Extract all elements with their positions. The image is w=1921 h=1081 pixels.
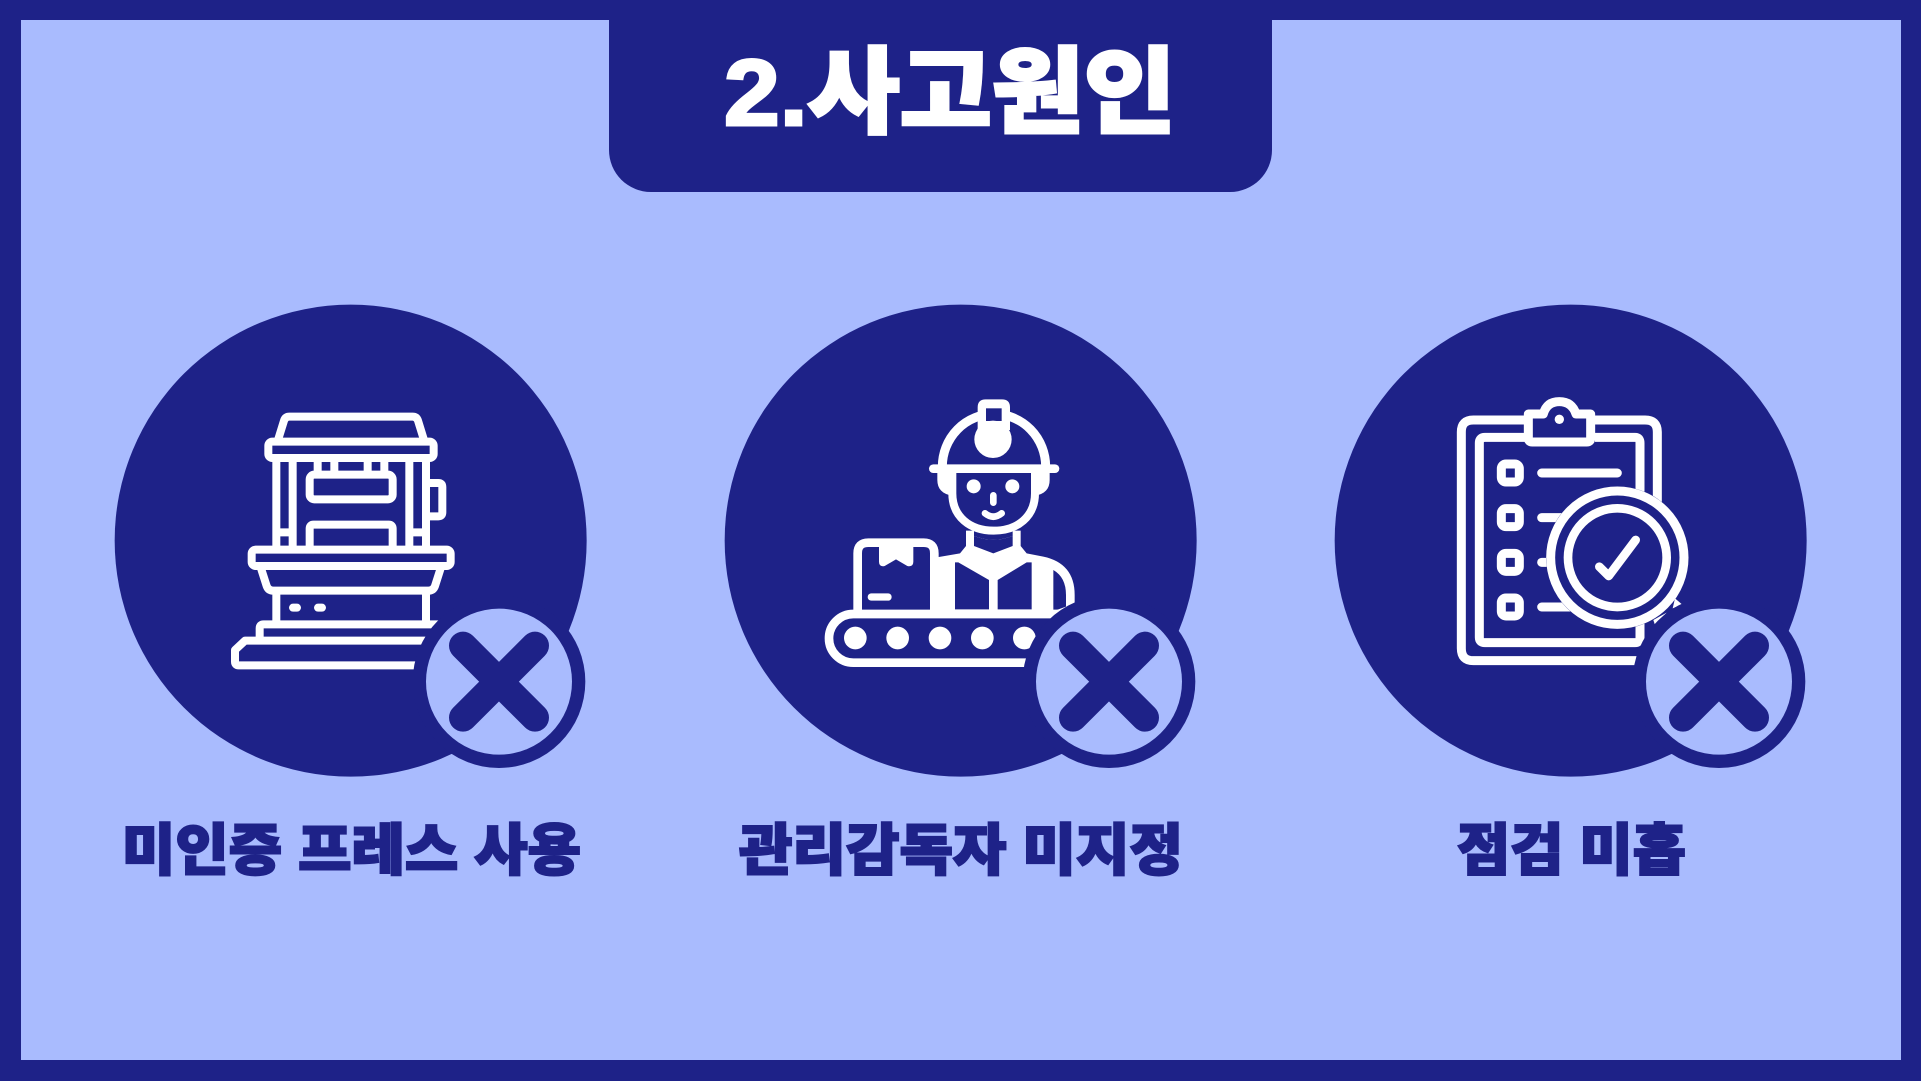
- conveyor: [829, 614, 1077, 663]
- head and face: [937, 472, 1050, 531]
- badge: X mark: [1023, 595, 1195, 768]
- title: 2.사고원인: [724, 40, 1176, 145]
- panel: press machine cause: [115, 305, 587, 777]
- magnifier with check: [1546, 486, 1689, 629]
- box: [858, 543, 934, 612]
- clip: [1528, 402, 1591, 442]
- label: inspection not done: 점검 미흡: [1457, 819, 1686, 882]
- helmet: [933, 399, 1055, 469]
- badge: X mark: [1633, 595, 1805, 768]
- title tab: [609, 10, 1272, 192]
- label: supervisor not assigned: 관리감독자 미지정: [739, 819, 1183, 882]
- title tab shape: [609, 10, 1272, 192]
- icon: clipboard checklist: [1461, 402, 1689, 661]
- navy circle: [725, 305, 1197, 777]
- navy circle: [1335, 305, 1807, 777]
- panel: supervisor cause: [725, 305, 1197, 777]
- label: press machine: 미인증 프레스 사용: [122, 819, 581, 882]
- body: [937, 531, 1075, 612]
- icon: worker with conveyor: [829, 399, 1077, 663]
- clipboard board: [1461, 420, 1670, 661]
- checklist: [1501, 464, 1617, 616]
- badge: X mark: [413, 595, 585, 768]
- panel: inspection cause: [1335, 305, 1807, 777]
- icon: press machine: [235, 417, 467, 665]
- navy circle: [115, 305, 587, 777]
